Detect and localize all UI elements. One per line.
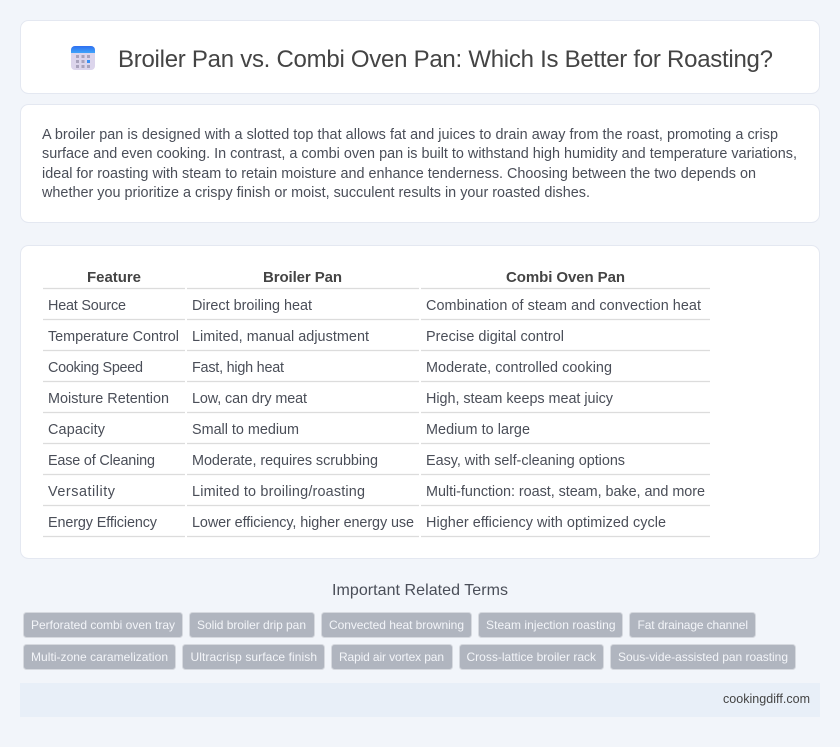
panel: comparison table [20,246,820,558]
intro paragraph: surface and even cooking. In contrast, a combi oven pan is built to withstand high humidity and temperature variations, [42,146,797,162]
tag [190,612,314,638]
row: temperature control: Precise digital control [426,329,564,345]
panel: introduction [20,104,820,222]
row: energy efficiency [48,515,666,531]
tag: Solid broiler drip pan [197,618,306,632]
row: capacity: Small to medium [192,422,299,438]
row: versatility: Multi-function: roast, steam, bake, and more [426,484,705,500]
row: cooking speed [48,360,612,376]
tag: Perforated combi oven tray [31,618,175,632]
title: Broiler Pan vs. Combi Oven Pan: Which Is Better for Roasting? [118,46,773,73]
row: cooking speed: Cooking Speed [48,360,143,376]
row: moisture retention: Low, can dry meat [192,391,307,407]
tag [630,612,756,638]
row: cooking speed: Fast, high heat [192,360,284,376]
row: energy efficiency: Energy Efficiency [48,515,158,531]
intro paragraph: ideal for roasting with steam to retain moisture and enhance tenderness. Choosing between the two depends on [42,166,756,182]
intro paragraph: whether you prioritize a crispy finish or moist, succulent results in your roasted dishes. [41,185,590,201]
row: temperature control [48,329,564,345]
heading: important related terms: Important Related Terms [332,582,508,599]
row: energy efficiency: Higher efficiency with optimized cycle [426,515,666,531]
footer source: cookingdiff.com [723,692,810,706]
row: ease of cleaning [48,453,625,469]
tag: Ultracrisp surface finish [190,650,317,664]
tag [322,612,472,638]
row: ease of cleaning: Ease of Cleaning [48,453,155,469]
tag: Cross-lattice broiler rack [466,650,597,664]
row: heat source: Heat Source [48,298,126,314]
row: moisture retention: Moisture Retention [48,391,169,407]
tag [460,644,604,670]
table header row: Broiler Pan [263,269,342,286]
tag [610,644,796,670]
tag: Steam injection roasting [486,618,616,632]
row: versatility: Limited to broiling/roasting [192,484,365,500]
icon: calendar [71,46,95,70]
tag: Rapid air vortex pan [339,650,444,664]
intro paragraph: A broiler pan is designed with a slotted top that allows fat and juices to drain away from the roast, promoting a crisp [42,127,778,143]
row: temperature control: Temperature Control [48,329,179,345]
tag: Convected heat browning [329,618,464,632]
row: capacity [48,422,530,438]
row: capacity: Medium to large [426,422,530,438]
row: temperature control: Limited, manual adjustment [192,329,369,345]
tag [24,612,182,638]
tag [182,644,324,670]
row: moisture retention [48,391,614,407]
header panel [20,20,820,94]
row: moisture retention: High, steam keeps meat juicy [426,391,614,407]
row: ease of cleaning: Moderate, requires scrubbing [192,453,378,469]
tag [332,644,452,670]
table header row: Feature [87,269,141,286]
row: heat source: Direct broiling heat [192,298,312,314]
row: cooking speed: Moderate, controlled cooking [426,360,612,376]
tag: Sous-vide-assisted pan roasting [618,650,788,664]
row: energy efficiency: Lower efficiency, higher energy use [192,515,414,531]
related term tags [24,612,796,670]
row: versatility [48,484,705,500]
table header row: Combi Oven Pan [506,269,625,286]
tag [24,644,176,670]
footer bar [20,683,820,717]
table header row [87,269,625,286]
tag: Fat drainage channel [638,618,748,632]
row: heat source [48,298,701,314]
row: versatility: Versatility [48,484,116,500]
tag [478,612,622,638]
tag: Multi-zone caramelization [31,650,168,664]
row: capacity: Capacity [48,422,106,438]
row: ease of cleaning: Easy, with self-cleaning options [426,453,625,469]
intro paragraph [41,127,797,201]
row: heat source: Combination of steam and convection heat [426,298,701,314]
